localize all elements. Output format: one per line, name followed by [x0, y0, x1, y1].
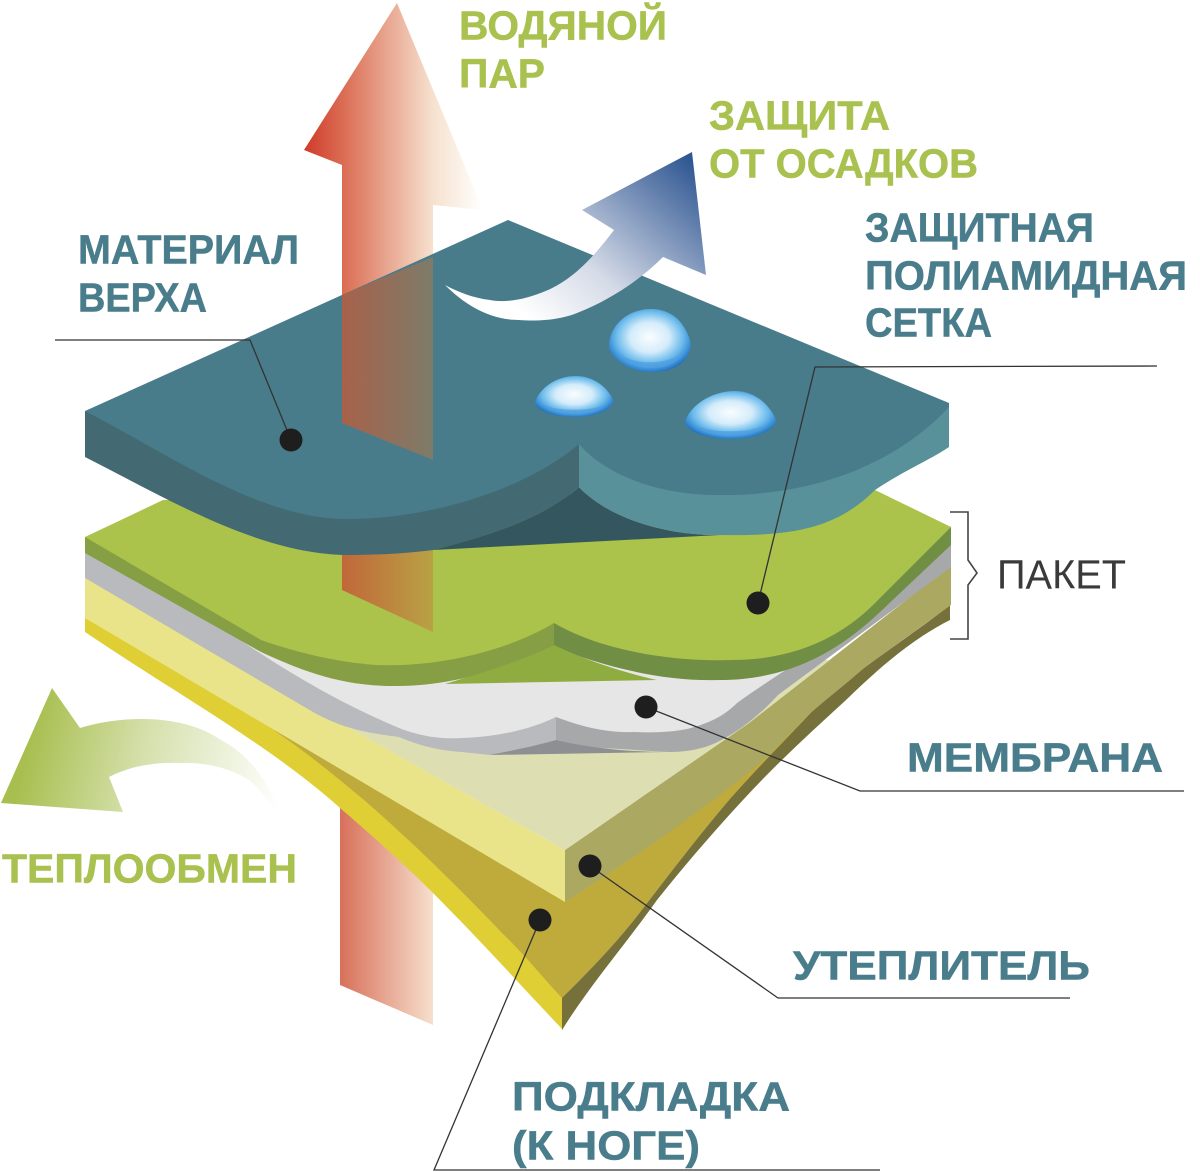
arrow: water vapour, lower section	[340, 800, 433, 1025]
label: water vapour: ПАР	[459, 50, 545, 96]
leader lines	[55, 340, 1184, 1170]
label: lining: ПОДКЛАДКА	[512, 1074, 790, 1120]
layer: membrane	[85, 545, 951, 755]
bracket: package	[950, 512, 977, 639]
label: precipitation protection	[709, 92, 978, 186]
arrow: water vapour, over green layer	[342, 540, 433, 632]
label: upper material	[78, 226, 299, 320]
layer: upper material	[85, 220, 949, 555]
icon: water drops	[535, 309, 776, 439]
arrow: precipitation protection	[445, 152, 706, 321]
label: protective polyamide mesh: ЗАЩИТНАЯ	[865, 204, 1094, 250]
label: membrane: МЕМБРАНА	[907, 734, 1163, 780]
label: water vapour	[459, 2, 667, 96]
arrow: heat exchange	[1, 688, 281, 820]
label: package: ПАКЕТ	[997, 552, 1126, 598]
label: insulation: УТЕПЛИТЕЛЬ	[793, 942, 1090, 988]
label: protective polyamide mesh: СЕТКА	[865, 300, 992, 346]
label: water vapour: ВОДЯНОЙ	[459, 2, 667, 48]
layer: lining	[85, 605, 950, 1030]
label: protective polyamide mesh: ПОЛИАМИДНАЯ	[865, 252, 1187, 298]
arrow: water vapour through upper material	[342, 257, 433, 460]
label: lining: (К НОГЕ)	[512, 1122, 700, 1168]
label: precipitation protection: ОТ ОСАДКОВ	[709, 140, 978, 186]
label: heat exchange: ТЕПЛООБМЕН	[2, 846, 297, 892]
layer: insulation	[85, 565, 951, 902]
label: precipitation protection: ЗАЩИТА	[709, 92, 890, 138]
label: protective polyamide mesh	[865, 204, 1187, 346]
label: lining	[512, 1074, 790, 1168]
arrow: water vapour, upper section	[304, 3, 483, 300]
marker dots	[280, 428, 770, 932]
label: upper material: ВЕРХА	[78, 274, 207, 320]
layer: green mesh	[85, 490, 951, 686]
label: upper material: МАТЕРИАЛ	[78, 226, 299, 272]
